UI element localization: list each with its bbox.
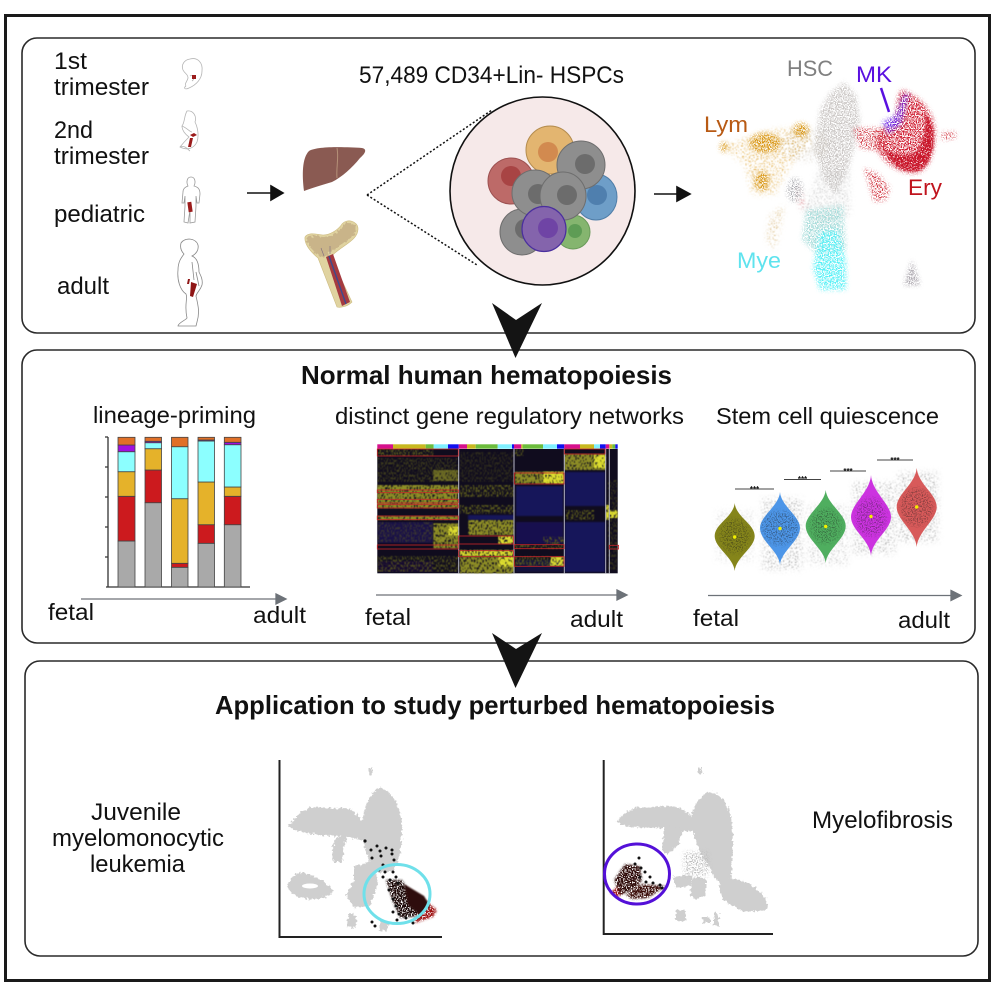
label: Ery: Ery [908,175,942,200]
text: juvenile myelomonocytic leukemia: Juvenile [91,799,181,826]
heading: application: Application to study perturbed hematopoiesis [215,690,775,720]
arrow: fetal to adult, heatmap [376,590,627,600]
heading: normal hematopoiesis: Normal human hematopoiesis [301,360,672,390]
illustration: HSPC cells in circle [450,97,635,285]
violin plots: stem cell quiescence [715,456,938,571]
text: pediatric: pediatric [54,201,145,228]
label: MK: MK [856,62,892,87]
panel: sample sources and atlas [22,38,975,333]
arrow: chevron between lower panels [492,633,542,688]
scatter map: UMAP of lineages [720,82,956,290]
dotted zoom lines [367,110,492,265]
text: juvenile myelomonocytic leukemia: leukemia [90,851,186,878]
violin plots: stem cell quiescence: *** [890,456,901,465]
text: 2nd trimester: 2nd [54,117,93,144]
subheading: gene regulatory networks: distinct gene regulatory networks [335,403,684,429]
text: juvenile myelomonocytic leukemia: myelomonocytic [52,825,224,852]
icon: femur with marrow [305,221,358,307]
text: adult: adult [570,606,624,632]
label: HSC: HSC [787,56,833,81]
label: Mye: Mye [737,248,781,273]
text: myelofibrosis: Myelofibrosis [812,807,953,834]
arrow: chevron between top panels [492,303,542,358]
icon: pediatric body [182,177,200,223]
text: adult: adult [253,602,307,628]
arrow: to tissues [247,186,283,200]
subheading: lineage-priming: lineage-priming [93,402,256,428]
icon: liver [303,147,365,191]
violin plots: stem cell quiescence: *** [798,475,808,484]
text: cell count: 57,489 CD34+Lin- HSPCs [359,62,624,89]
text: adult: adult [898,607,951,633]
heatmap highlighted modules [377,449,619,566]
icon: second trimester fetus [180,111,198,151]
scatter plot: myelofibrosis [604,760,773,934]
significance bars [735,460,913,489]
text: fetal: fetal [365,604,411,630]
panel: perturbed hematopoiesis [25,661,978,956]
heatmap colour strip [377,444,618,449]
arrow: fetal to adult, bars [81,594,286,604]
icon: adult body [178,239,202,326]
text: 2nd trimester: trimester [54,143,149,170]
text: fetal: fetal [48,599,94,625]
text: fetal: fetal [693,605,739,631]
violin plots: stem cell quiescence: *** [750,485,760,494]
stacked bar chart: lineage priming [105,437,250,587]
text: 1st trimester: 1st [54,48,87,75]
scatter plot: JMML [280,760,442,937]
heatmap: gene regulatory networks [377,444,619,573]
icon: first trimester embryo [182,59,202,89]
arrow: fetal to adult, violins [708,590,961,600]
text: adult: adult [57,273,109,300]
MK pointer [881,88,889,112]
violin plots: stem cell quiescence: *** [843,467,854,476]
label: Lym: Lym [704,112,748,137]
arrow: to scatter map [654,187,690,201]
panel: normal human hematopoiesis [22,350,975,643]
text: 1st trimester: trimester [54,74,149,101]
subheading: stem cell quiescence: Stem cell quiescence [716,403,939,429]
